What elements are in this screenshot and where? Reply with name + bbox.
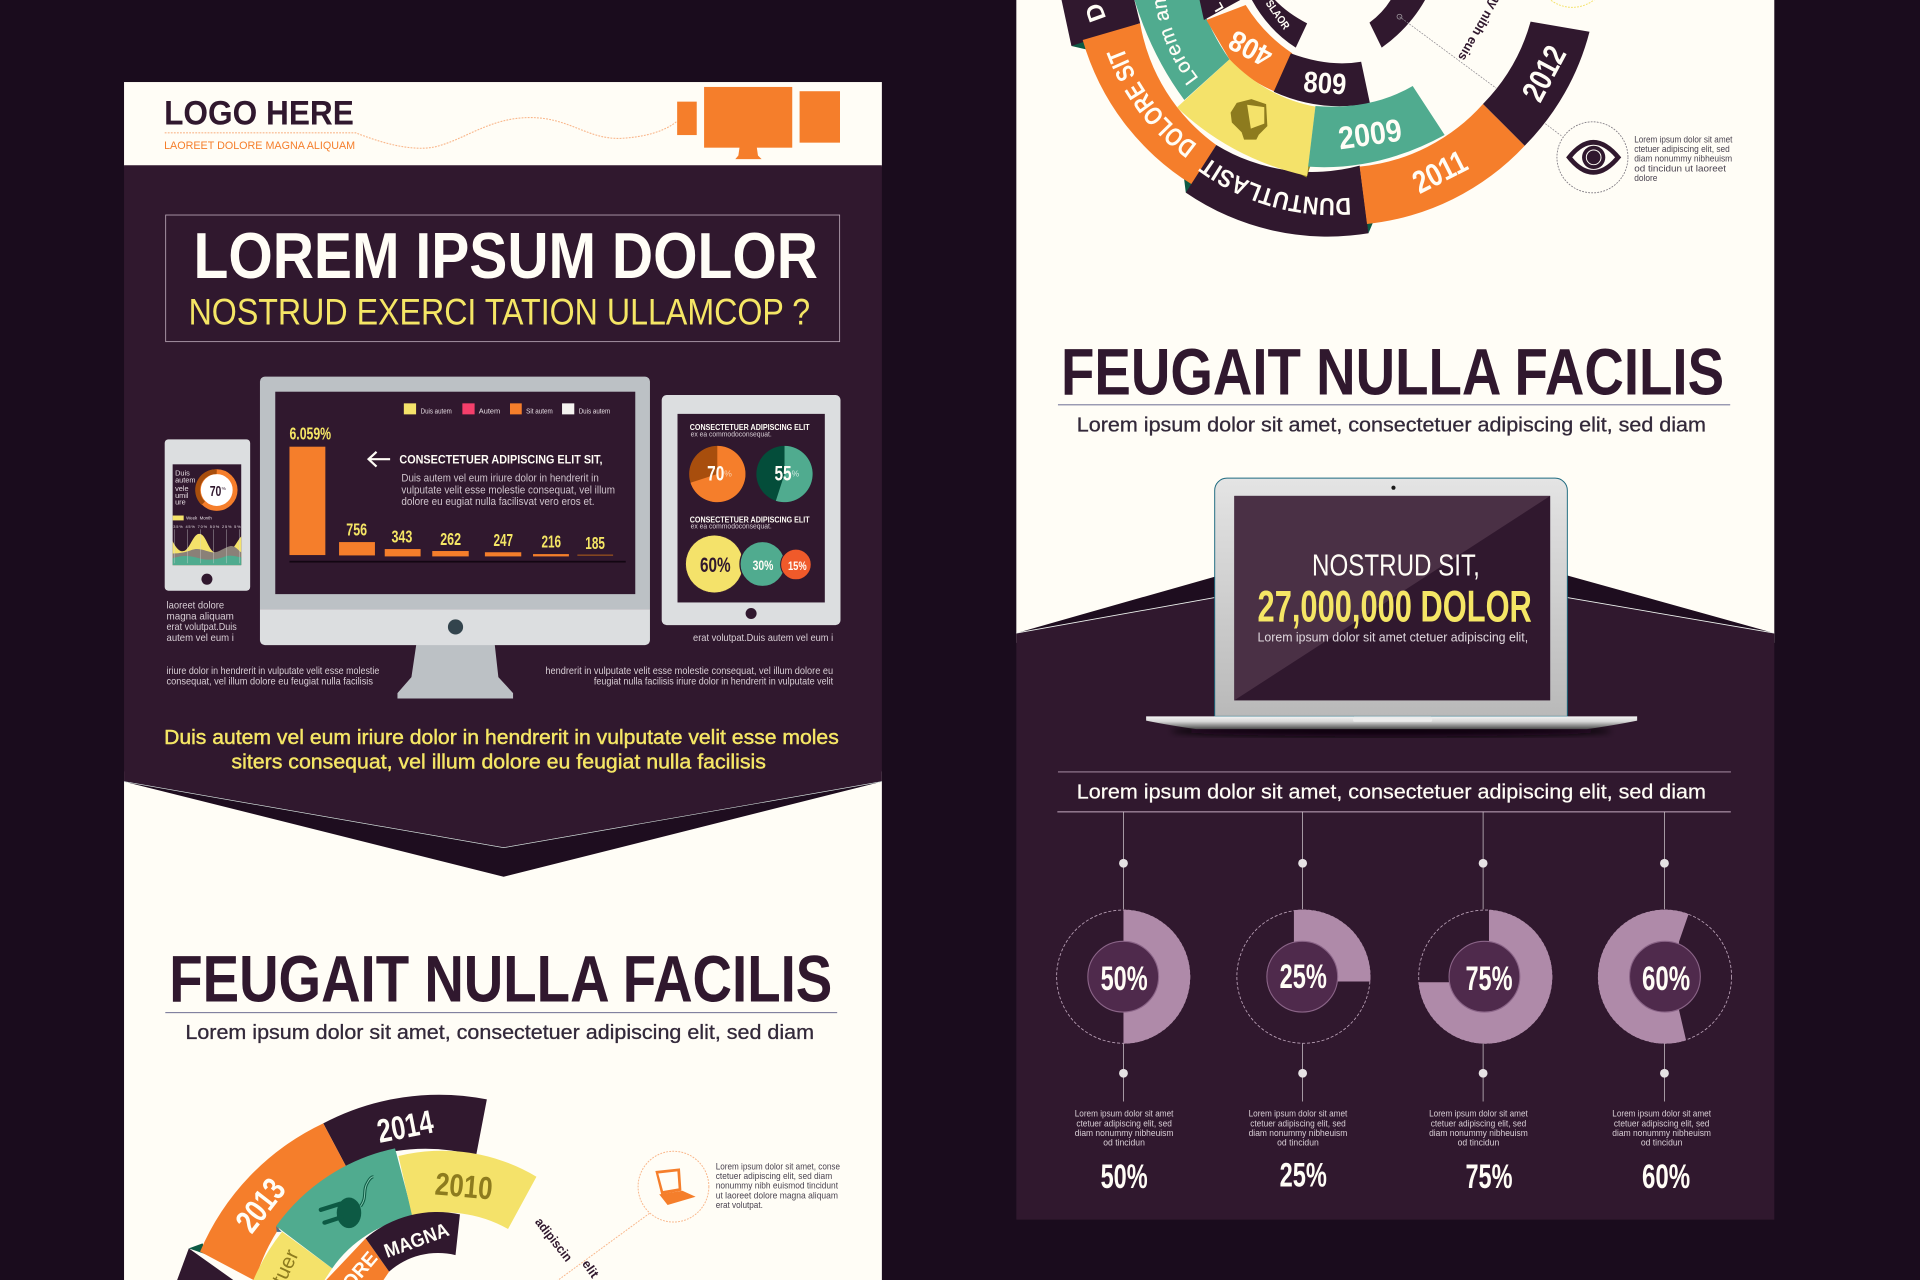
donut 60% bbox=[1598, 910, 1732, 1044]
callout: eye: ctetuer adipiscing elit, sed bbox=[1634, 144, 1730, 154]
panel: purple lower section bbox=[1016, 576, 1774, 1220]
header: logo: LOGO HERE bbox=[164, 94, 354, 132]
column captions: od tincidun bbox=[1641, 1138, 1683, 1148]
radial chart: upper half: adipiscin bbox=[532, 1215, 576, 1265]
yellow statement: Duis autem vel eum iriure dolor in hendrerit in vulputate velit esse moles bbox=[164, 727, 839, 749]
radial chart: lower half: 2009 bbox=[1336, 112, 1404, 156]
monitor text: Duis autem vel eum iriure dolor in hendrerit in bbox=[401, 473, 599, 485]
title box: LOREM IPSUM DOLOR bbox=[193, 219, 818, 292]
heading: feugait left: FEUGAIT NULLA FACILIS bbox=[169, 943, 832, 1017]
donut 25% bbox=[1236, 910, 1370, 1044]
callout: eye: dolore bbox=[1634, 173, 1658, 183]
device: phone bbox=[165, 439, 250, 591]
yellow statement: siters consequat, vel illum dolore eu feugiat nulla facilisis bbox=[231, 751, 766, 773]
bottom percentages: 60% bbox=[1642, 1158, 1690, 1196]
column captions: Lorem ipsum dolor sit amet bbox=[1612, 1109, 1711, 1119]
radial chart: lower half: 408 bbox=[1224, 23, 1278, 73]
bar chart: 343 bbox=[391, 527, 412, 547]
bubble chart bbox=[686, 535, 811, 593]
radial chart: upper half: elit bbox=[579, 1257, 603, 1280]
bar chart: 216 bbox=[541, 532, 561, 552]
laptop screen text: NOSTRUD SIT, bbox=[1312, 549, 1480, 583]
callout: laptop: erat volutpat. bbox=[716, 1200, 763, 1210]
callout: laptop: ut laoreet dolore magna aliquam bbox=[716, 1190, 838, 1200]
header: logo: LAOREET DOLORE MAGNA ALIQUAM bbox=[164, 140, 355, 152]
device: phone: ure bbox=[175, 498, 186, 507]
radial chart: lower half: D bbox=[1081, 0, 1112, 25]
bar chart: 756 bbox=[346, 520, 367, 540]
laptop screen text: 27,000,000 DOLOR bbox=[1258, 583, 1532, 632]
heading: feugait right: FEUGAIT NULLA FACILIS bbox=[1061, 335, 1724, 409]
column captions bbox=[1075, 1109, 1711, 1148]
device captions: erat volutpat.Duis autem vel eum i bbox=[693, 633, 833, 644]
device: phone: % bbox=[222, 486, 227, 492]
callout: laptop: nonummy nibh euismod tincidunt bbox=[716, 1181, 839, 1191]
device: phone: autem bbox=[175, 476, 195, 485]
panel: left poster bbox=[124, 82, 882, 1280]
device captions: magna aliquam bbox=[167, 611, 234, 622]
device: tablet: CONSECTETUER ADIPISCING ELIT bbox=[690, 514, 810, 524]
bubble chart: 15% bbox=[788, 559, 807, 573]
device captions: erat volutpat.Duis bbox=[167, 622, 237, 633]
legend: Duis autem bbox=[421, 406, 452, 415]
donut 75%: 75% bbox=[1465, 960, 1512, 998]
radial chart: lower half bbox=[1062, 0, 1590, 237]
connector lines bbox=[1119, 812, 1669, 1102]
panel: purple hero with chevron bbox=[124, 165, 882, 877]
radial chart: lower half: DOLORE SIT bbox=[1106, 51, 1196, 158]
icon: plug bbox=[321, 1177, 373, 1228]
bottom percentages: 50% bbox=[1101, 1158, 1148, 1196]
bar chart: 6.059% bbox=[289, 423, 331, 443]
callout: laptop: ctetuer adipiscing elit, sed diam bbox=[716, 1171, 832, 1181]
device captions bbox=[167, 600, 833, 688]
column captions: diam nonummy nibheuism bbox=[1612, 1128, 1711, 1138]
donut 50% bbox=[1056, 910, 1190, 1044]
icon: arrow bbox=[369, 452, 390, 467]
device: tablet: ex ea commodoconsequat. bbox=[691, 429, 772, 438]
column captions: ctetuer adipiscing elit, sed bbox=[1431, 1118, 1526, 1128]
heading: feugait left bbox=[165, 943, 837, 1044]
device captions: iriure dolor in hendrerit in vulputate velit esse molestie bbox=[167, 666, 380, 677]
heading: feugait right: Lorem ipsum dolor sit amet, consectetuer adipiscing elit, sed diam bbox=[1077, 414, 1706, 436]
monitor text bbox=[399, 452, 615, 508]
callout: top yellow circle bbox=[1537, 0, 1608, 7]
bubble chart: 60% bbox=[700, 554, 731, 577]
callout: eye: od tincidun ut laoreet bbox=[1634, 163, 1727, 173]
yellow statement bbox=[164, 727, 839, 773]
legend bbox=[404, 403, 610, 415]
monitor text: dolore eu eugiat nulla facilisvat vero eros et. bbox=[401, 496, 594, 508]
title box: NOSTRUD EXERCI TATION ULLAMCOP ? bbox=[189, 291, 810, 332]
radial chart: lower half: L bbox=[1210, 0, 1227, 14]
donut 50%: 50% bbox=[1101, 960, 1148, 998]
pie chart 70%: 70 bbox=[707, 463, 724, 486]
callout: laptop: Lorem ipsum dolor sit amet, conse bbox=[716, 1161, 840, 1171]
heading: feugait left: Lorem ipsum dolor sit amet, consectetuer adipiscing elit, sed diam bbox=[185, 1022, 814, 1044]
pie chart 70% bbox=[689, 446, 745, 502]
column captions: od tincidun bbox=[1103, 1138, 1145, 1148]
header: logo bbox=[164, 94, 677, 152]
pie chart 70%: % bbox=[724, 468, 732, 478]
radial chart: upper half bbox=[171, 1095, 603, 1280]
laptop screen text: Lorem ipsum dolor sit amet ctetuer adipiscing elit, bbox=[1258, 630, 1528, 645]
bottom percentages: 75% bbox=[1465, 1158, 1512, 1196]
radial chart: lower half: DUNTUTLASIT bbox=[1198, 160, 1350, 216]
device captions: hendrerit in vulputate velit esse molestie consequat, vel illum dolore eu bbox=[545, 666, 833, 677]
device: phone: Month bbox=[200, 516, 212, 521]
callout: eye: diam nonummy nibheuism bbox=[1634, 154, 1732, 164]
device: phone: umil bbox=[175, 491, 189, 500]
device: phone: Week bbox=[186, 516, 198, 521]
callout: eye: Lorem ipsum dolor sit amet bbox=[1634, 134, 1733, 144]
icon: eye bbox=[1566, 140, 1621, 175]
radial chart: lower half: 809 bbox=[1302, 66, 1347, 102]
radial chart: upper half: MAGNA bbox=[381, 1219, 452, 1263]
donut 75% bbox=[1418, 910, 1552, 1044]
device: tablet bbox=[662, 395, 840, 625]
callout: laptop bbox=[557, 1151, 840, 1280]
device captions: laoreet dolore bbox=[167, 600, 224, 611]
subheading: Lorem ipsum dolor sit amet, consectetuer adipiscing elit, sed diam bbox=[1077, 781, 1706, 803]
bar chart: 185 bbox=[585, 533, 605, 553]
bar chart: 262 bbox=[440, 529, 461, 549]
bar chart: 247 bbox=[493, 530, 513, 550]
device: monitor bbox=[260, 377, 650, 698]
device: phone: 35% 45% 70% 50% 25% 5% bbox=[173, 524, 241, 529]
radial chart: lower half: 2012 bbox=[1514, 40, 1573, 107]
device: tablet: ex ea commodoconsequat. bbox=[691, 522, 772, 531]
column captions: ctetuer adipiscing elit, sed bbox=[1076, 1118, 1172, 1128]
device captions: feugiat nulla facilisis iriure dolor in hendrerit in vulputate velit bbox=[594, 677, 833, 688]
column captions: ctetuer adipiscing elit, sed bbox=[1614, 1118, 1709, 1128]
column captions: od tincidun bbox=[1458, 1138, 1499, 1148]
device captions: autem vel eum i bbox=[167, 633, 234, 644]
device captions: consequat, vel illum dolore eu feugiat nulla facilisis bbox=[167, 677, 373, 688]
monitor text: vulputate velit esse molestie consequat, vel illum bbox=[401, 484, 615, 496]
legend: Duis autem bbox=[579, 406, 610, 415]
legend: Autem bbox=[479, 406, 500, 415]
column captions: Lorem ipsum dolor sit amet bbox=[1429, 1109, 1528, 1119]
callout: eye bbox=[1399, 17, 1733, 193]
column captions: ctetuer adipiscing elit, sed bbox=[1250, 1118, 1346, 1128]
bottom percentages: 25% bbox=[1280, 1157, 1327, 1195]
laptop screen text bbox=[1258, 549, 1532, 645]
bottom percentages bbox=[1101, 1157, 1690, 1196]
laptop bbox=[1146, 478, 1637, 737]
radial chart: upper half: 2014 bbox=[374, 1104, 437, 1151]
column captions: diam nonummy nibheuism bbox=[1075, 1128, 1173, 1138]
column captions: od tincidun bbox=[1277, 1138, 1319, 1148]
radial chart: upper half: 2010 bbox=[434, 1166, 494, 1206]
icon: laptop bbox=[655, 1168, 696, 1205]
pie chart 55%: 55 bbox=[774, 463, 792, 486]
radial chart: lower half: 2011 bbox=[1406, 143, 1473, 201]
pie chart 55%: % bbox=[792, 468, 800, 478]
column captions: Lorem ipsum dolor sit amet bbox=[1075, 1109, 1174, 1119]
column captions: diam nonummy nibheuism bbox=[1249, 1128, 1347, 1138]
device: phone: vele bbox=[175, 484, 189, 493]
icon: CRT monitor bbox=[1231, 99, 1267, 140]
bubble chart: 30% bbox=[753, 558, 773, 573]
legend: Sit autem bbox=[526, 406, 553, 415]
column captions: Lorem ipsum dolor sit amet bbox=[1249, 1109, 1348, 1119]
donut 25%: 25% bbox=[1280, 958, 1327, 996]
device: phone: 70 bbox=[210, 484, 221, 500]
radial chart: upper half: 2013 bbox=[229, 1172, 293, 1240]
monitor text: CONSECTETUER ADIPISCING ELIT SIT, bbox=[399, 452, 602, 466]
bar chart bbox=[289, 423, 626, 563]
heading: feugait right bbox=[1058, 335, 1730, 436]
title box bbox=[166, 215, 840, 342]
panel: right poster bbox=[1016, 0, 1774, 1220]
column captions: diam nonummy nibheuism bbox=[1429, 1128, 1528, 1138]
device: phone: Duis bbox=[175, 468, 190, 477]
device: tablet: CONSECTETUER ADIPISCING ELIT bbox=[690, 422, 810, 432]
icon: orange devices bbox=[677, 87, 840, 159]
donut 60%: 60% bbox=[1642, 960, 1690, 998]
pie chart 55% bbox=[756, 446, 813, 502]
